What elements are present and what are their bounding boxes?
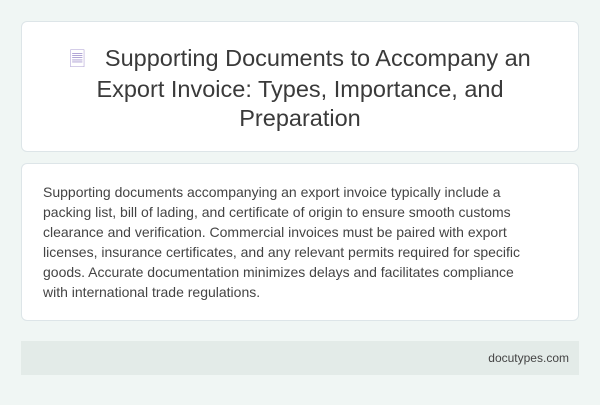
title: 🗏 Supporting Documents to Accompany an	[69, 45, 531, 71]
title: Export Invoice: Types, Importance, and	[96, 76, 504, 102]
description text: Supporting documents accompanying an export invoice typically include a	[43, 184, 501, 200]
title	[69, 45, 531, 131]
title panel	[21, 21, 579, 152]
footer: docutypes.com	[488, 351, 569, 365]
title: Preparation	[239, 105, 361, 131]
description text: goods. Accurate documentation minimizes delays and facilitates compliance	[43, 264, 514, 280]
description text: packing list, bill of lading, and certificate of origin to ensure smooth customs	[43, 204, 511, 220]
description text	[43, 184, 520, 300]
description text: with international trade regulations.	[43, 284, 260, 300]
description text: licenses, insurance certificates, and any relevant permits required for specific	[43, 244, 520, 260]
description text: clearance and verification. Commercial invoices must be paired with export	[43, 224, 507, 240]
footer	[21, 341, 579, 375]
description panel	[21, 163, 579, 321]
